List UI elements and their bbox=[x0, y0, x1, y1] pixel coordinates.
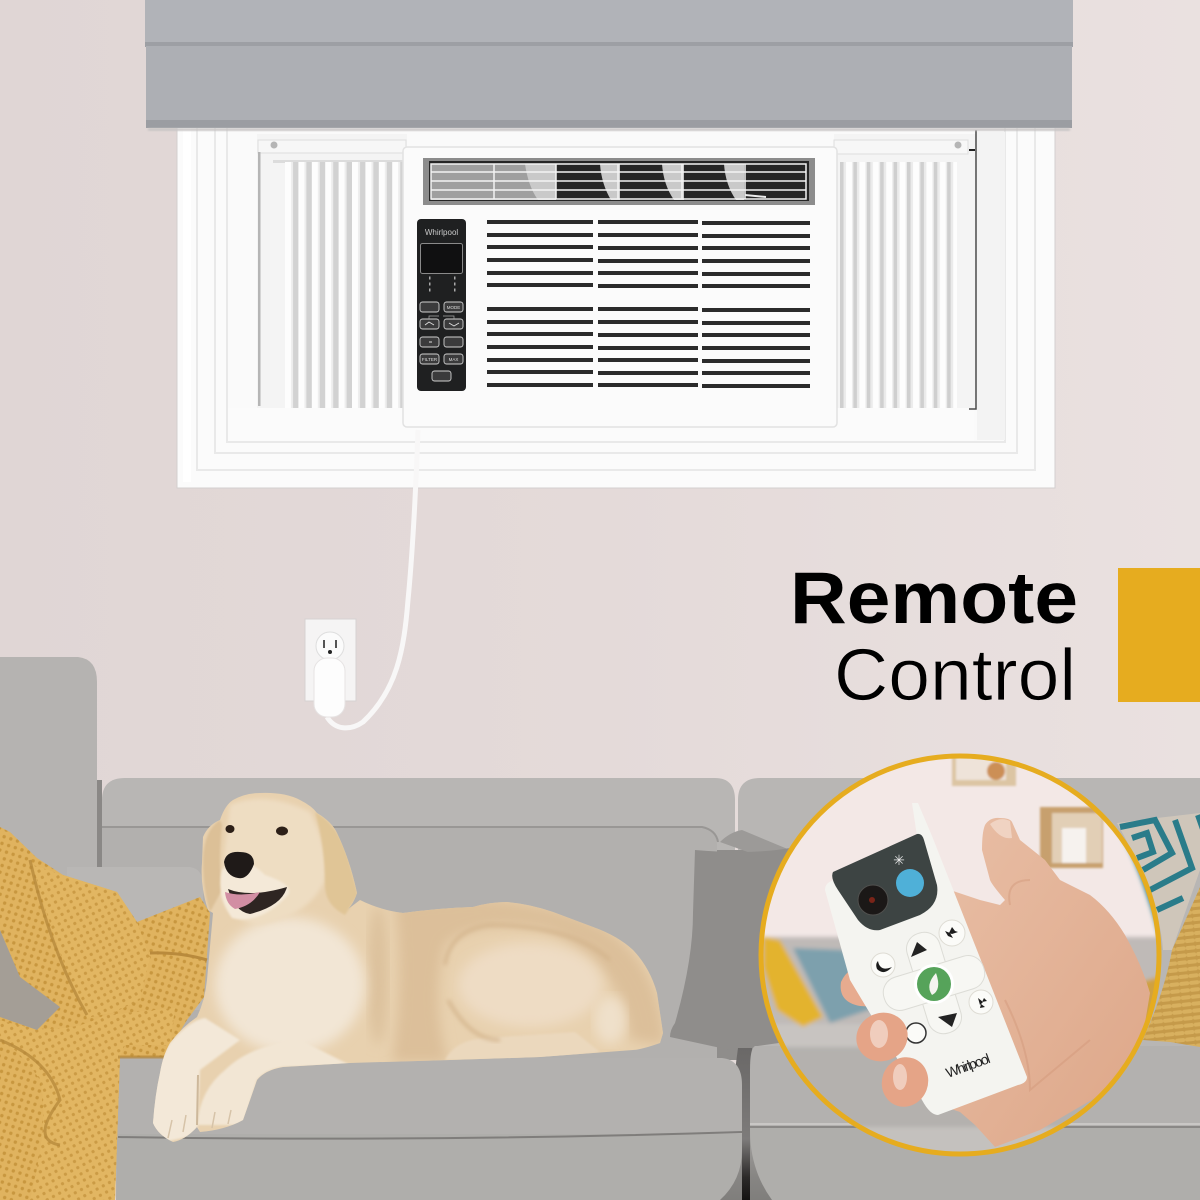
right ear bbox=[315, 812, 358, 915]
snowflake mark: ✳ bbox=[893, 852, 905, 868]
minus triangle button bbox=[938, 1013, 957, 1027]
control panel bbox=[417, 219, 466, 391]
control panel: FILTER bbox=[422, 357, 438, 362]
blue button bbox=[896, 869, 924, 897]
yellow knit pillow bbox=[1143, 887, 1200, 1047]
moon button bbox=[871, 953, 895, 977]
plus triangle button bbox=[911, 942, 927, 957]
hand bbox=[953, 818, 1150, 1147]
front legs bbox=[150, 1018, 240, 1145]
eyes bbox=[226, 825, 234, 833]
top air vent bbox=[423, 158, 815, 205]
timer button bbox=[906, 1023, 926, 1043]
remote IR head bbox=[832, 834, 937, 930]
left arm bbox=[0, 657, 97, 880]
front louvers bbox=[487, 222, 810, 386]
side panel: right accordion bbox=[834, 130, 976, 409]
directional pad bbox=[882, 932, 986, 1034]
fingers bbox=[848, 819, 1012, 1113]
buttons bbox=[420, 302, 463, 381]
grey toy in blanket bbox=[0, 930, 60, 1030]
golden retriever dog bbox=[150, 793, 665, 1145]
control panel: MODE bbox=[447, 305, 460, 310]
fur shading bbox=[150, 799, 665, 1145]
power lens bbox=[858, 885, 888, 915]
control panel: MAX bbox=[449, 357, 458, 362]
remote inset photo bbox=[755, 755, 1165, 1162]
yellow blanket bbox=[0, 827, 210, 1200]
window trim bbox=[177, 127, 1055, 488]
mouth bbox=[228, 887, 287, 914]
heading: Remote Control: Remote bbox=[790, 558, 1078, 639]
tongue bbox=[225, 892, 260, 909]
seat cushion right bbox=[750, 1046, 1200, 1200]
sofa bbox=[0, 657, 1200, 1200]
yellow accent block bbox=[1118, 568, 1200, 702]
plug bbox=[314, 658, 345, 717]
wall outlet bbox=[305, 619, 356, 701]
fan speed button bbox=[969, 990, 993, 1014]
arm cushion bbox=[67, 867, 203, 1010]
seat cushion left bbox=[116, 1058, 742, 1200]
power cord bbox=[327, 430, 418, 728]
blurred background sofa bbox=[764, 844, 1156, 1152]
air conditioner unit bbox=[403, 147, 837, 427]
nose bbox=[224, 852, 254, 878]
green eco button bbox=[914, 964, 954, 1004]
muzzle bbox=[220, 861, 289, 919]
left ear bbox=[203, 820, 222, 912]
left back cushion bbox=[102, 778, 735, 860]
display bbox=[420, 244, 462, 274]
gap between seats bbox=[718, 1048, 775, 1200]
background shelves bbox=[952, 757, 1103, 868]
patterned pillow bbox=[1117, 813, 1200, 950]
side panel: left accordion bbox=[257, 134, 407, 408]
head shading bbox=[220, 799, 326, 925]
gold circle ring bbox=[761, 756, 1159, 1154]
remote brand: Whirlpool bbox=[944, 1050, 992, 1081]
heading: Remote Control bbox=[790, 558, 1078, 716]
back grey pillow bbox=[720, 830, 790, 860]
index finger bbox=[840, 972, 866, 1006]
lower back panel bbox=[102, 828, 717, 1070]
leaf bbox=[929, 973, 938, 995]
right back cushion bbox=[738, 778, 1200, 1060]
heading: Remote Control: Control bbox=[834, 635, 1076, 716]
dog silhouette bbox=[153, 793, 663, 1142]
fan button bbox=[939, 920, 965, 946]
remote control body bbox=[825, 803, 1027, 1115]
grey pillow bbox=[670, 848, 800, 1050]
window shade bbox=[145, 0, 1073, 131]
whirlpool logo: Whirlpool bbox=[425, 228, 458, 237]
